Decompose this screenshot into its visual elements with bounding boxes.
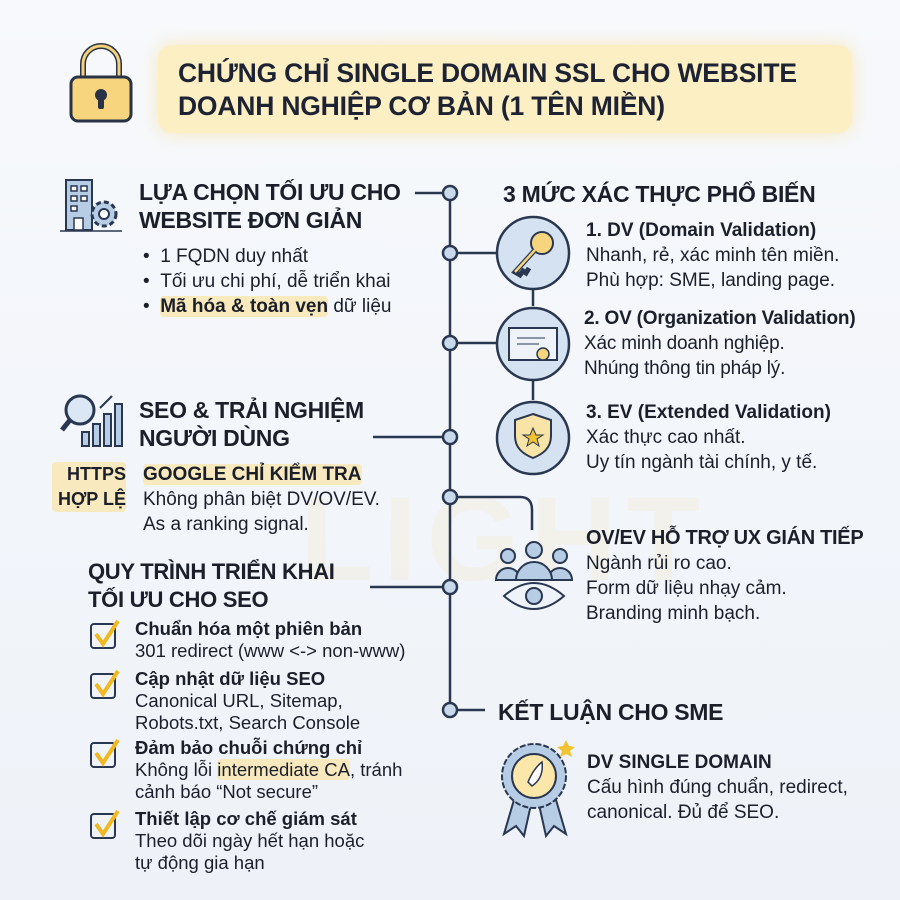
icon: DV key <box>496 216 570 290</box>
text: EV: Xác thực cao nhất. <box>586 427 746 448</box>
heading: process: TỐI ƯU CHO SEO <box>88 587 268 612</box>
text: UX: Ngành rủi ro cao. <box>586 553 732 574</box>
text: google: GOOGLE CHỈ KIỂM TRA <box>143 464 362 485</box>
heading: process: QUY TRÌNH TRIỂN KHAI <box>88 559 335 584</box>
badge: https <box>52 462 126 512</box>
checklist: 301 redirect (www <-> non-www) <box>135 640 405 661</box>
icon: padlock <box>70 43 132 122</box>
text: google: Không phân biệt DV/OV/EV. <box>143 489 380 510</box>
title banner <box>158 45 852 133</box>
bullets: • 1 FQDN duy nhất <box>143 246 308 267</box>
heading: option: WEBSITE ĐƠN GIẢN <box>139 207 362 233</box>
bullets <box>143 246 392 317</box>
heading: seo: NGƯỜI DÙNG <box>139 425 290 451</box>
watermark: LIGHT <box>300 472 710 606</box>
icon: OV certificate <box>496 306 570 382</box>
text: DV: Nhanh, rẻ, xác minh tên miền. <box>586 245 839 266</box>
heading: option <box>139 179 401 233</box>
icon: EV shield <box>496 400 570 476</box>
text: EV <box>586 402 831 473</box>
bullets: • Mã hóa & toàn vẹn dữ liệu <box>143 296 392 317</box>
text: conclusion: DV SINGLE DOMAIN <box>587 752 772 773</box>
icon: seo chart <box>60 394 123 447</box>
icon: building gear <box>60 179 122 232</box>
checklist <box>90 618 405 873</box>
text: UX: Branding minh bạch. <box>586 603 760 624</box>
heading: option: LỰA CHỌN TỐI ƯU CHO <box>139 179 401 205</box>
badge: https: HTTPS <box>67 464 126 484</box>
heading: seo <box>139 397 364 451</box>
title banner: DOANH NGHIỆP CƠ BẢN (1 TÊN MIỀN) <box>178 91 665 121</box>
checklist: tự động gia hạn <box>135 852 265 873</box>
checklist: cảnh báo “Not secure” <box>135 781 318 802</box>
title banner: CHỨNG CHỈ SINGLE DOMAIN SSL CHO WEBSITE <box>178 58 797 88</box>
heading: 3 levels: 3 MỨC XÁC THỰC PHỔ BIẾN <box>503 181 815 207</box>
text: conclusion: canonical. Đủ để SEO. <box>587 802 779 823</box>
checklist: Robots.txt, Search Console <box>135 712 360 733</box>
text: google <box>143 462 380 535</box>
text: UX: OV/EV HỖ TRỢ UX GIÁN TIẾP <box>586 527 863 549</box>
checklist: Chuẩn hóa một phiên bản <box>135 618 362 639</box>
heading: process <box>88 558 335 612</box>
icon: users eye <box>495 541 573 610</box>
text: conclusion <box>587 752 848 823</box>
text: UX: Form dữ liệu nhạy cảm. <box>586 578 787 599</box>
text: UX <box>586 526 863 624</box>
badge: https: HỢP LỆ <box>58 489 126 509</box>
checklist: Thiết lập cơ chế giám sát <box>135 808 357 829</box>
bullets: • Tối ưu chi phí, dễ triển khai <box>143 271 390 292</box>
text: google: As a ranking signal. <box>143 514 309 535</box>
text: DV: Phù hợp: SME, landing page. <box>586 270 835 291</box>
text: OV: 2. OV (Organization Validation) <box>584 308 855 329</box>
text: EV: Uy tín ngành tài chính, y tế. <box>586 452 817 473</box>
text: OV <box>584 308 855 379</box>
text: OV: Xác minh doanh nghiệp. <box>584 333 785 354</box>
text: DV <box>586 220 839 291</box>
heading: seo: SEO & TRẢI NGHIỆM <box>139 397 364 423</box>
text: OV: Nhúng thông tin pháp lý. <box>584 358 785 379</box>
checklist: Không lỗi intermediate CA, tránh <box>135 759 402 780</box>
text: conclusion: Cấu hình đúng chuẩn, redirect, <box>587 777 848 798</box>
checklist: Theo dõi ngày hết hạn hoặc <box>135 830 364 851</box>
checklist: Cập nhật dữ liệu SEO <box>135 668 325 689</box>
icon: award rocket <box>501 740 575 838</box>
text: DV: 1. DV (Domain Validation) <box>586 220 816 241</box>
text: EV: 3. EV (Extended Validation) <box>586 402 831 423</box>
checklist: Canonical URL, Sitemap, <box>135 690 343 711</box>
heading: conclusion: KẾT LUẬN CHO SME <box>498 699 723 725</box>
checklist: Đảm bảo chuỗi chứng chỉ <box>135 737 362 758</box>
